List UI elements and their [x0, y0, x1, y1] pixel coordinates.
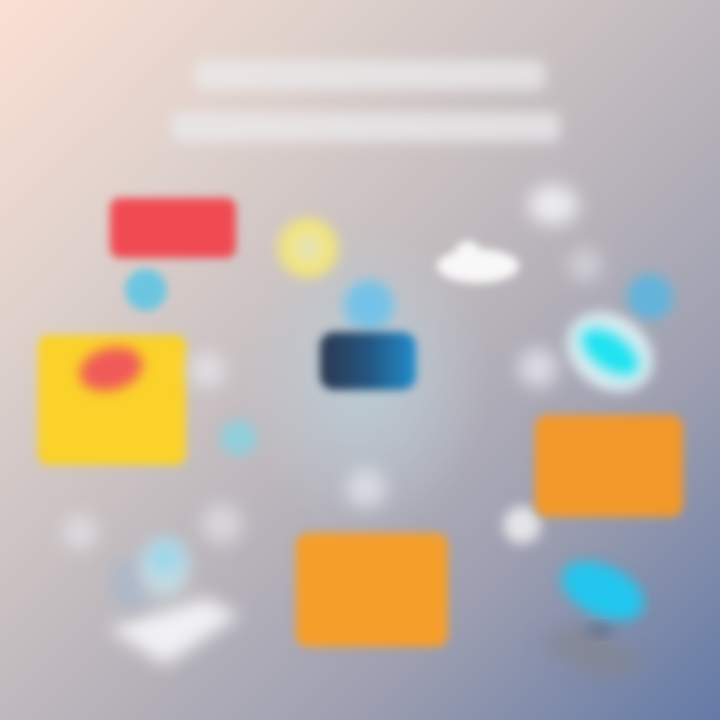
icon: teal dot — [221, 420, 257, 456]
icon: red shape on yellow card — [75, 340, 147, 398]
panel: orange card right — [535, 415, 683, 517]
icon: laptop lower left — [108, 540, 240, 665]
central glow — [240, 225, 490, 535]
icon: white dot lower right — [503, 506, 541, 544]
icon: cyan device lower right — [535, 550, 653, 680]
icon: cyan circle right — [627, 274, 673, 320]
panel: yellow card — [38, 335, 186, 465]
small pale connector dots — [62, 348, 558, 550]
icon: small white blobs upper right — [528, 185, 601, 281]
red heading box — [110, 198, 236, 258]
icon: central blue pill with top circle — [320, 280, 416, 390]
icon: white cloud — [437, 241, 519, 283]
panel: orange card bottom — [296, 533, 448, 647]
icon: yellow circle — [278, 218, 338, 278]
icon: cyan capsule right — [552, 296, 668, 408]
icon: small cyan circle left — [125, 269, 167, 311]
title — [172, 60, 560, 142]
